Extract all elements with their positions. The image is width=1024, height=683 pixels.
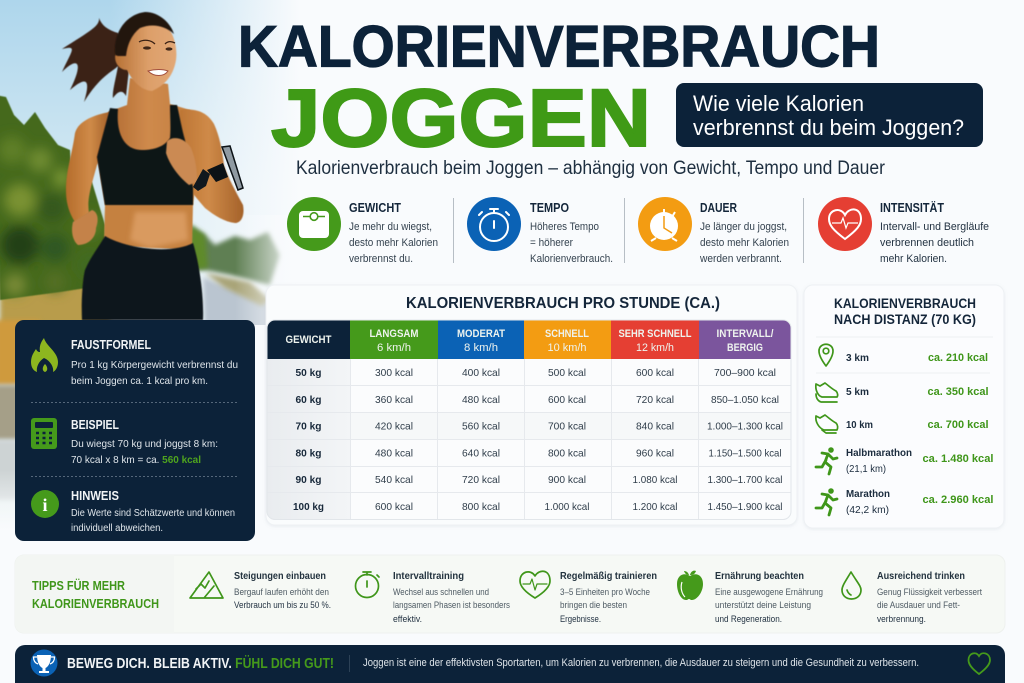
panel: calories by distance: (21,1 km) (846, 463, 886, 475)
factor: Gewicht: verbrennst du. (349, 253, 413, 265)
table rows: 1.080 kcal (632, 474, 678, 486)
factor: Gewicht: Je mehr du wiegst, (349, 221, 432, 233)
factor: Tempo: Höheres Tempo (530, 221, 599, 233)
icon: stopwatch (356, 572, 379, 598)
tip: Intervalltraining: effektiv. (393, 614, 422, 624)
tip: Steigungen: Bergauf laufen erhöht den (234, 587, 329, 597)
factor: Tempo: TEMPO (530, 201, 569, 215)
factor: Tempo: = höherer (530, 237, 573, 249)
factor: Gewicht (287, 197, 438, 265)
abs highlight (130, 212, 188, 248)
panel: calorie table: SCHNELL (545, 328, 589, 340)
table rows: 300 kcal (375, 367, 413, 379)
tip: Trinken: die Ausdauer und Fett- (877, 600, 960, 610)
distance heading (834, 296, 976, 327)
text: Faustformel (71, 338, 238, 387)
tip: Regelmäßig (560, 570, 657, 624)
title: Kalorienverbrauch: KALORIENVERBRAUCH (238, 14, 880, 80)
callout: question (676, 83, 983, 147)
table rows: 900 kcal (548, 474, 586, 486)
table rows: 850–1.050 kcal (711, 394, 779, 406)
factor: Dauer: desto mehr Kalorien (700, 237, 789, 249)
panel: calorie table: 10 km/h (548, 342, 586, 354)
table rows: 50 kg (296, 367, 322, 379)
icon: water drop (842, 572, 861, 599)
panel: calories by distance: ca. 700 kcal (928, 419, 988, 431)
title: Joggen: JOGGEN (271, 73, 651, 164)
tips heading (32, 578, 159, 611)
panel: calorie table: 6 km/h (377, 342, 411, 354)
panel: calories by distance: ca. 210 kcal (928, 352, 988, 364)
tip: Intervalltraining: Wechsel aus schnellen und (393, 587, 489, 597)
factor: Intensität: mehr Kalorien. (880, 253, 947, 265)
ground (0, 282, 112, 324)
text: Faustformel: beim Joggen ca. 1 kcal pro km. (71, 375, 208, 387)
callout: question: verbrennst du beim Joggen? (693, 115, 964, 140)
table rows: 1.200 kcal (632, 501, 678, 513)
neck and chest skin (97, 78, 200, 205)
tip: Trinken (877, 570, 982, 624)
icon: trophy (30, 650, 58, 676)
icon: stopwatch (467, 197, 521, 251)
head and face (115, 21, 176, 91)
roadside and road (202, 276, 266, 325)
panel: calories by distance: (42,2 km) (846, 504, 889, 516)
icon: info (31, 490, 59, 518)
icon: mountains (190, 572, 223, 598)
panel: calorie table: 12 km/h (636, 342, 674, 354)
right arm with hand (166, 110, 244, 223)
table rows: 480 kcal (462, 394, 500, 406)
footer banner (15, 645, 1005, 683)
panel: calories by distance: Marathon (846, 488, 890, 500)
tip: Ernährung: und Regeneration. (715, 614, 782, 624)
table rows: 400 kcal (462, 367, 500, 379)
icon: runner (816, 488, 837, 515)
slogan: BEWEG DICH. BLEIB AKTIV. FÜHL DICH GUT! (67, 655, 334, 672)
tip: Steigungen (234, 570, 331, 610)
midriff skin (104, 203, 193, 250)
icon: running shoe (816, 415, 838, 433)
panel: calorie table: BERGIG (727, 342, 763, 354)
panel: tips (15, 555, 1005, 633)
icon: running shoe (816, 383, 838, 402)
hand over top (166, 138, 197, 185)
table rows: 600 kcal (375, 501, 413, 513)
text: Hinweis (71, 489, 235, 534)
panel: calorie table: INTERVALL/ (716, 328, 774, 340)
tip: Regelmäßig: Ergebnisse. (560, 614, 601, 624)
tip: Steigungen: Verbrauch um bis zu 50 %. (234, 600, 331, 610)
factor: Dauer: DAUER (700, 201, 737, 215)
table rows: 1.000–1.300 kcal (707, 420, 783, 432)
panel: calories by distance: 10 km (846, 419, 873, 431)
tip: Intervalltraining: Intervalltraining (393, 570, 464, 582)
black sports top (97, 105, 193, 205)
table rows: 60 kg (296, 394, 322, 406)
icon: heart outline (968, 653, 990, 674)
table rows: 840 kcal (636, 420, 674, 432)
text: Beispiel: 70 kcal x 8 km = ca. 560 kcal (71, 454, 201, 466)
icon: heart with pulse (520, 571, 550, 598)
table rows: 700 kcal (548, 420, 586, 432)
factor: Intensität: Intervall- und Bergläufe (880, 221, 989, 233)
factor: Tempo: Kalorienverbrauch. (530, 253, 613, 265)
table rows: 600 kcal (548, 394, 586, 406)
factor: Dauer: werden verbrannt. (699, 253, 782, 265)
text: Beispiel (71, 418, 218, 466)
table rows: 960 kcal (636, 448, 674, 460)
panel: calories by distance: ca. 350 kcal (928, 386, 988, 398)
text: Hinweis: HINWEIS (71, 489, 119, 503)
table rows: 1.000 kcal (544, 501, 590, 513)
tip: Regelmäßig: Regelmäßig trainieren (560, 570, 657, 582)
panel: calories by distance: ca. 2.960 kcal (922, 494, 994, 506)
factor: Dauer: Je länger du joggst, (700, 221, 787, 233)
tip: Ernährung (715, 570, 823, 624)
factor: Intensität: INTENSITÄT (880, 200, 944, 215)
icon: alarm clock (638, 197, 692, 251)
factor: Gewicht: GEWICHT (349, 201, 401, 215)
icon: apple (677, 571, 703, 600)
text: Beispiel: Du wiegst 70 kg und joggst 8 km: (71, 438, 218, 450)
table rows: 420 kcal (375, 420, 413, 432)
leggings (82, 236, 203, 320)
face features (139, 40, 175, 76)
factor: Gewicht: desto mehr Kalorien (349, 237, 438, 249)
callout: question: Wie viele Kalorien (693, 91, 864, 116)
table rows: 500 kcal (548, 367, 586, 379)
icon: heart with pulse (818, 197, 872, 251)
tip: Trinken: Ausreichend trinken (877, 570, 965, 582)
tips heading: TIPPS FÜR MEHR (32, 578, 125, 593)
text: Faustformel: FAUSTFORMEL (71, 338, 151, 352)
subtitle: Kalorienverbrauch beim Joggen – abhängig von Gewicht, Tempo und Dauer (296, 158, 886, 179)
table rows: 90 kg (296, 474, 322, 486)
armband and watch (193, 146, 243, 191)
table rows: 800 kcal (462, 501, 500, 513)
tip: Steigungen: Steigungen einbauen (234, 570, 326, 582)
icon: calculator (31, 418, 57, 449)
factor: Intensität: verbrennen deutlich (880, 237, 974, 249)
table rows: 640 kcal (462, 448, 500, 460)
table rows: 720 kcal (462, 474, 500, 486)
table rows: 700–900 kcal (714, 367, 776, 379)
left fist (72, 210, 98, 245)
icon: info: i (42, 495, 48, 515)
panel: calorie table: MODERAT (457, 328, 505, 340)
photo background: sky, trees, road (0, 0, 282, 504)
panel: calorie table: GEWICHT (286, 334, 332, 346)
panel: calorie table: SEHR SCHNELL (618, 328, 692, 340)
tip: Regelmäßig: bringen die besten (560, 600, 627, 610)
tip: Trinken: verbrennung. (877, 614, 926, 624)
footer text: Joggen ist eine der effektivsten Sportarten, um Kalorien zu verbrennen, die Ausdauer zu steigern und die Gesundheit zu verbessern. (363, 657, 919, 669)
icon: runner (816, 447, 837, 474)
table rows: 600 kcal (636, 367, 674, 379)
table rows: 1.300–1.700 kcal (708, 474, 782, 486)
distant trees (190, 225, 280, 285)
panel: calories by distance: 3 km (846, 352, 869, 364)
table header row (267, 320, 791, 520)
factor: Dauer (638, 197, 789, 265)
table rows: 70 kg (296, 420, 322, 432)
icon: scale (287, 197, 341, 251)
tips heading: KALORIENVERBRAUCH (32, 597, 159, 611)
table rows: 720 kcal (636, 394, 674, 406)
ponytail (62, 18, 130, 102)
text: Beispiel: BEISPIEL (71, 418, 119, 432)
tip: Intervalltraining: langsamen Phasen ist besonders (393, 600, 510, 610)
table rows: 540 kcal (375, 474, 413, 486)
tip: Trinken: Genug Flüssigkeit verbessert (877, 587, 982, 597)
panel: calories by distance: ca. 1.480 kcal (922, 453, 994, 465)
tip: Regelmäßig: 3–5 Einheiten pro Woche (560, 587, 650, 597)
panel: calories by distance: 5 km (846, 386, 869, 398)
panel: rule of thumb (15, 320, 255, 541)
table rows: 100 kg (293, 501, 324, 513)
table rows: 1.150–1.500 kcal (708, 448, 782, 460)
table rows: 480 kcal (375, 448, 413, 460)
text: Hinweis: Die Werte sind Schätzwerte und können (71, 508, 235, 519)
left arm (66, 112, 110, 222)
table rows: 1.450–1.900 kcal (708, 501, 782, 513)
icon: flame (31, 338, 58, 372)
tip: Ernährung: Ernährung beachten (715, 570, 804, 582)
table heading: KALORIENVERBRAUCH PRO STUNDE (CA.) (406, 295, 720, 312)
text: Faustformel: Pro 1 kg Körpergewicht verbrennst du (71, 359, 238, 371)
icon: location pin (819, 344, 833, 366)
text: Hinweis: individuell abweichen. (71, 523, 163, 534)
tip: Ernährung: unterstützt deine Leistung (715, 600, 811, 610)
table rows: 560 kcal (462, 420, 500, 432)
foreground trees (0, 95, 106, 300)
table rows: 360 kcal (375, 394, 413, 406)
panel: calorie table (266, 285, 797, 525)
tip: Intervalltraining (393, 570, 510, 624)
tip: Ernährung: Eine ausgewogene Ernährung (715, 587, 823, 597)
table rows: 80 kg (296, 448, 322, 460)
table rows (293, 367, 783, 513)
panel: calorie table: LANGSAM (370, 328, 418, 340)
panel: calorie table: 8 km/h (464, 342, 498, 354)
photo: jogger on a country road (0, 0, 282, 504)
panel: calories by distance: Halbmarathon (846, 447, 912, 459)
factor: Tempo (467, 197, 613, 265)
distance heading: KALORIENVERBRAUCH (834, 296, 976, 311)
table rows: 800 kcal (548, 448, 586, 460)
factor: Intensität (818, 197, 989, 265)
hair on head (115, 12, 174, 56)
distance heading: NACH DISTANZ (70 KG) (834, 312, 976, 327)
panel: calories by distance (804, 285, 1004, 528)
